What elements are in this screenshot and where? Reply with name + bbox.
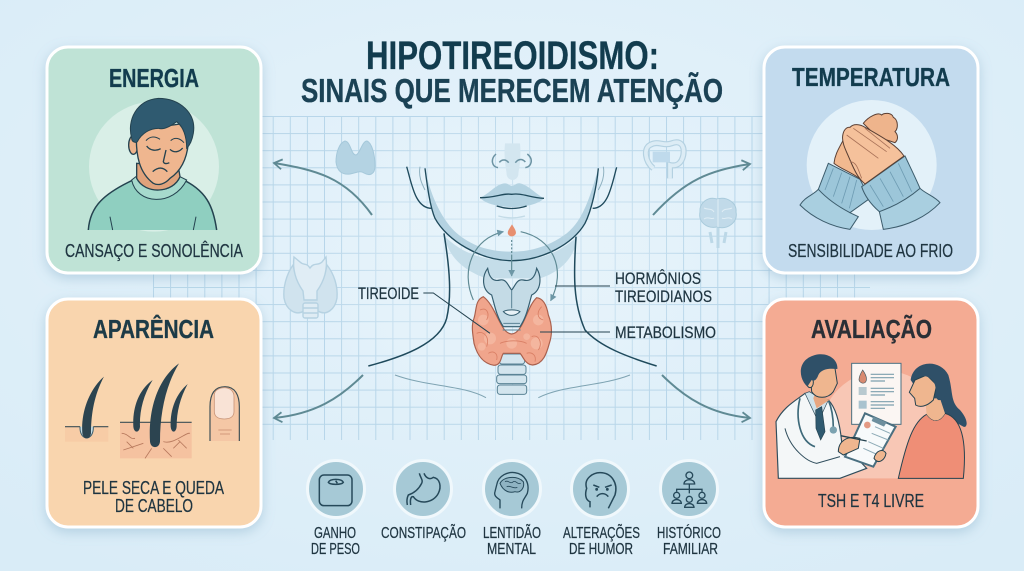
panel: temperatura <box>764 47 978 273</box>
label: metabolismo: METABOLISMO <box>615 324 716 342</box>
label: lentidao mental: MENTAL <box>487 541 536 558</box>
icon: family tree <box>660 460 718 518</box>
icon: scale <box>308 460 364 518</box>
label: ganho de peso: DE PESO <box>311 541 360 558</box>
label: hormonios tireoidianos: HORMÔNIOS <box>615 269 701 288</box>
label: alteracoes de humor: DE HUMOR <box>569 541 633 558</box>
background icon: large thyroid <box>284 257 337 318</box>
title: HIPOTIREOIDISMO: <box>366 34 659 78</box>
leader lines <box>423 286 610 333</box>
neck shadow <box>445 237 577 278</box>
feedback arrows <box>468 232 557 301</box>
hormone droplet <box>508 224 516 236</box>
neck lines <box>368 233 657 366</box>
jaw shading <box>425 168 598 261</box>
label: tireoide: TIREOIDE <box>358 285 419 303</box>
title <box>301 34 723 109</box>
label: ganho de peso <box>311 525 360 558</box>
label: alteracoes de humor: ALTERAÇÕES <box>563 525 640 542</box>
heading: temperatura: TEMPERATURA <box>792 64 950 92</box>
heading: energia: ENERGIA <box>109 65 199 93</box>
heading: avaliacao: AVALIAÇÃO <box>811 314 932 344</box>
nose <box>492 143 531 180</box>
caption: DE CABELO <box>115 495 193 516</box>
jaw and ears <box>407 167 617 261</box>
thyroid gland <box>472 297 551 365</box>
icon: stomach <box>394 460 452 518</box>
icon: sad face <box>572 460 628 518</box>
lips <box>480 183 544 207</box>
caption: SENSIBILIDADE AO FRIO <box>788 240 953 261</box>
icon: brain head <box>484 460 540 518</box>
background icon: brain <box>700 198 736 248</box>
caption: TSH E T4 LIVRE <box>818 490 924 511</box>
icon: cold hands with sweater <box>800 100 940 230</box>
panel: aparencia <box>47 299 261 527</box>
panel: energia <box>47 47 261 273</box>
label: historico familiar: FAMILIAR <box>663 541 718 558</box>
label: lentidao mental <box>483 525 541 558</box>
arrow: bottom left <box>274 375 363 418</box>
label: ganho de peso: GANHO <box>314 525 356 542</box>
label: constipacao: CONSTIPAÇÃO <box>381 525 466 542</box>
arrow: bottom right <box>662 375 750 418</box>
heading: aparencia: APARÊNCIA <box>93 314 214 344</box>
thyroid cartilage <box>484 268 540 327</box>
label: alteracoes de humor <box>563 525 640 558</box>
label: historico familiar: HISTÓRICO <box>657 525 721 542</box>
icon: doctor and patient <box>776 354 967 478</box>
background icon: small thyroid <box>336 141 375 175</box>
caption: PELE SECA E QUEDA <box>83 477 224 498</box>
panel: avaliacao <box>764 299 978 527</box>
title: SINAIS QUE MERECEM ATENÇÃO <box>301 72 723 109</box>
background icon: intestine <box>646 142 684 178</box>
label: hormonios tireoidianos: TIREOIDIANOS <box>615 288 712 306</box>
caption <box>83 477 224 516</box>
label: hormonios tireoidianos <box>615 269 712 306</box>
arrow: top right <box>653 164 750 215</box>
trachea <box>497 354 527 394</box>
central illustration: neck and thyroid <box>368 143 657 398</box>
caption: CANSAÇO E SONOLÊNCIA <box>65 240 243 261</box>
icon: hair and nail <box>65 363 239 458</box>
arrow: top left <box>274 163 372 215</box>
icon row: symptoms <box>308 460 721 558</box>
label: historico familiar <box>657 525 721 558</box>
icon: tired person <box>88 98 219 232</box>
label: lentidao mental: LENTIDÃO <box>483 525 541 542</box>
